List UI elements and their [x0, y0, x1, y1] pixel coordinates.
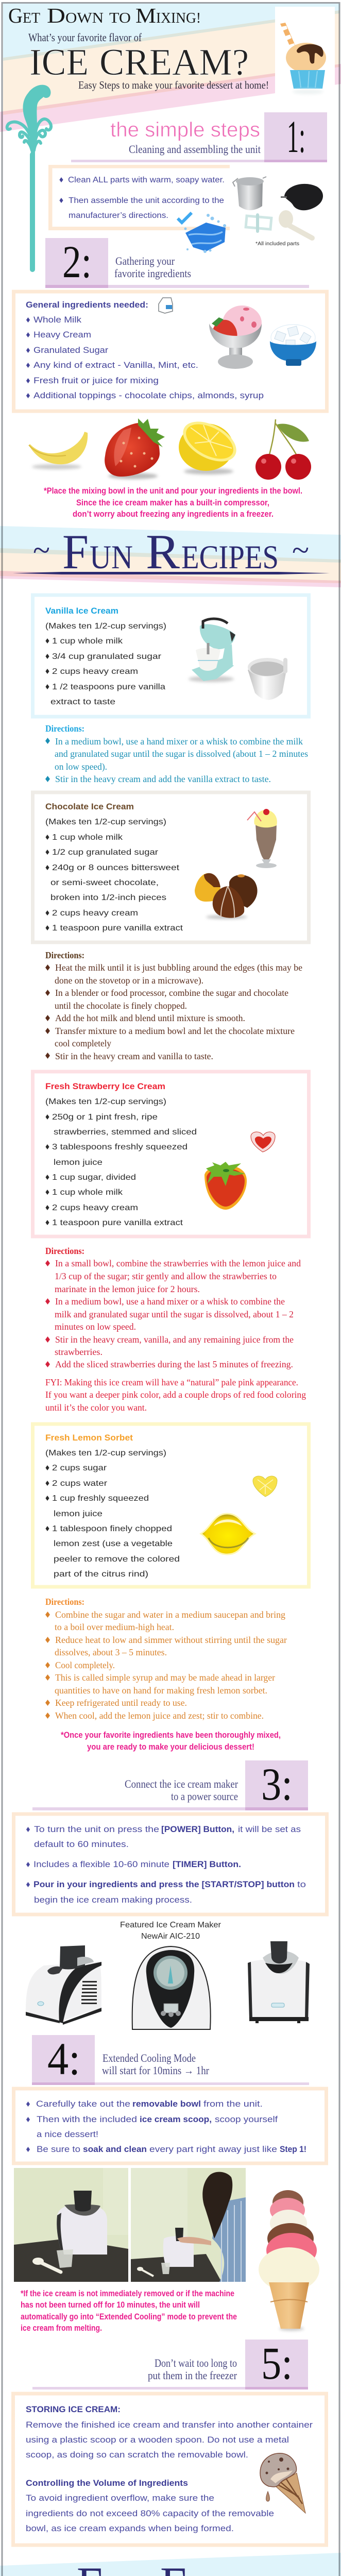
- heading: ice cream: [29, 41, 249, 83]
- panel: power instructions: [TIMER] Button.: [173, 1859, 241, 1869]
- step 1 heading: [71, 112, 327, 162]
- photo: woman using machine: [131, 2168, 246, 2282]
- panel: power instructions: to: [297, 1879, 306, 1889]
- panel: general ingredients: Heavy Cream: [33, 330, 91, 340]
- heading: fun recipes: ~: [33, 533, 50, 567]
- directions: vanilla: In a medium bowl, use a hand mixer or a whisk to combine the milk: [55, 736, 303, 747]
- caption: included parts: *All included parts: [255, 241, 299, 247]
- directions: chocolate: Stir in the heavy cream and vanilla to taste.: [55, 1051, 213, 1061]
- step 5 heading: [32, 2338, 308, 2389]
- panel: vanilla ice cream: 1 cup whole milk: [52, 637, 123, 646]
- photo: machine with cup and scoop: [14, 2168, 128, 2282]
- callout: ready to make dessert: you are ready to make your delicious dessert!: [87, 1742, 254, 1752]
- caption: featured ice cream maker: Featured Ice Cream Maker: [120, 1921, 221, 1929]
- icon: melting cone: [260, 2453, 305, 2513]
- directions: lemon sorbet: to a boil over medium-high heat.: [55, 1622, 174, 1632]
- directions: lemon sorbet: dissolves, about 3 – 5 minutes.: [55, 1647, 167, 1657]
- panel: lemon sorbet: peeler to remove the colored: [54, 1555, 180, 1564]
- panel: removing the ice cream: every part right away just like: [149, 2144, 277, 2154]
- panel: power instructions: Includes a flexible 10-60 minute: [33, 1859, 169, 1869]
- icon: glossy lemon: [201, 1514, 255, 1554]
- title: get down to mixing: ET: [23, 10, 40, 26]
- heading: ice cream: ICE: [29, 41, 89, 83]
- panel: general ingredients: Additional toppings - chocolate chips, almonds, syrup: [33, 391, 264, 400]
- callout: extended cooling note: automatically go into “Extended Cooling” mode to prevent the: [21, 2312, 237, 2321]
- icon: sugar bowl: [270, 325, 316, 366]
- icon: strawberry: [105, 418, 165, 479]
- directions: lemon sorbet: When cool, add the lemon juice and zest; stir to combine.: [55, 1710, 264, 1721]
- panel: general ingredients: [13, 292, 327, 411]
- panel: removing the ice cream: Step 1!: [280, 2144, 306, 2154]
- ornament: teal fountain: [7, 85, 51, 272]
- directions: lemon sorbet: quantities to have on hand for making fresh lemon sorbet.: [55, 1685, 267, 1696]
- panel: strawberry ice cream: 1 cup whole milk: [52, 1188, 123, 1197]
- panel: general ingredients: Whole Milk: [33, 315, 82, 325]
- directions: chocolate: [45, 950, 302, 1061]
- panel: strawberry ice cream: [33, 1072, 309, 1236]
- panel: power instructions: begin the ice cream making process.: [34, 1895, 192, 1905]
- panel: chocolate ice cream: 240g or 8 ounces bittersweet: [52, 863, 180, 872]
- directions: strawberry: strawberries.: [55, 1347, 103, 1357]
- panel: strawberry ice cream: (Makes ten 1/2-cup servings): [45, 1097, 166, 1106]
- step 2 heading: [45, 237, 309, 288]
- panel: storing ice cream: STORING ICE CREAM:: [26, 2404, 121, 2414]
- panel: storing ice cream: [13, 2394, 327, 2545]
- directions: vanilla: [45, 723, 308, 784]
- panel: strawberry ice cream: 3 tablespoons freshly squeezed: [52, 1143, 187, 1151]
- icon: strawberry heart: [251, 1132, 275, 1152]
- step 4 heading: will start for 10mins → 1hr: [102, 2064, 210, 2077]
- icon: mixing cup: [248, 658, 287, 700]
- directions: chocolate: Directions:: [45, 950, 84, 960]
- callout: mixing bowl note: don’t worry about freezing any ingredients in a freezer.: [73, 509, 274, 519]
- heading: fun recipes: ~: [292, 533, 309, 567]
- step 3 heading: Connect the ice cream maker: [125, 1777, 238, 1790]
- panel: vanilla ice cream: extract to taste: [50, 698, 115, 706]
- directions: vanilla: Directions:: [45, 723, 84, 734]
- heading: fun recipes: ECIPES: [181, 539, 279, 576]
- step 4 heading: 4:: [47, 2034, 80, 2084]
- callout: mixing bowl note: [44, 486, 302, 519]
- panel: removing the ice cream: Be sure to: [37, 2144, 80, 2154]
- icon: stand mixer: [189, 619, 235, 682]
- icon: chocolate truffles: [195, 873, 258, 919]
- directions: lemon sorbet: Combine the sugar and water in a medium saucepan and bring: [55, 1609, 285, 1620]
- step 3 heading: to a power source: [171, 1790, 238, 1803]
- panel: storing ice cream: To avoid ingredient overflow, make sure the: [26, 2493, 214, 2503]
- title: get down to mixing: OWN: [65, 10, 104, 26]
- panel: vanilla ice cream: 3/4 cup granulated sugar: [52, 652, 162, 661]
- directions: lemon sorbet: Reduce heat to low and simmer without stirring until the sugar: [55, 1635, 287, 1645]
- directions: strawberry: FYI: Making this ice cream will have a “natural” pale pink appearance.: [45, 1377, 298, 1387]
- directions: lemon sorbet: Cool completely.: [55, 1660, 115, 1670]
- heading: fun recipes: UN: [90, 539, 133, 576]
- directions: strawberry: minutes on low speed.: [55, 1321, 136, 1332]
- directions: chocolate: Heat the milk until it is just bubbling around the edges (this may be: [55, 962, 302, 973]
- directions: chocolate: until the chocolate is finely chopped.: [55, 1001, 187, 1011]
- icon: milk carton: [159, 298, 173, 313]
- panel: general ingredients: Granulated Sugar: [33, 345, 108, 355]
- step 1 heading: Cleaning and assembling the unit: [129, 143, 261, 156]
- panel: storing ice cream: Remove the finished ice cream and transfer into another container: [26, 2420, 313, 2430]
- callout: ready to make dessert: [61, 1730, 281, 1752]
- photo: maker angled view: [26, 1945, 101, 2025]
- icon: machine parts: [233, 177, 323, 238]
- panel: chocolate ice cream: 1 teaspoon pure vanilla extract: [52, 924, 183, 933]
- directions: lemon sorbet: [45, 1597, 287, 1721]
- panel: lemon sorbet: [33, 1424, 309, 1587]
- header colour bands: [0, 4, 341, 132]
- panel: removing the ice cream: Carefully take out the: [36, 2099, 130, 2109]
- directions: chocolate: done on the stovetop or in a microwave).: [55, 975, 203, 986]
- directions: chocolate: Add the hot milk and blend until mixture is smooth.: [55, 1013, 245, 1023]
- icon: strawberry sundae: [209, 306, 262, 369]
- panel: general ingredients: Any kind of extract - Vanilla, Mint, etc.: [33, 360, 198, 370]
- directions: vanilla: on low speed).: [55, 761, 107, 772]
- step 1 heading: 1:: [287, 112, 305, 162]
- panel: storing ice cream: using a plastic scoop or a wooden spoon. Do not use a metal: [26, 2435, 289, 2445]
- step 2 heading: 2:: [62, 237, 92, 287]
- step 3 heading: [32, 1759, 308, 1810]
- title: get down to mixing: IXING!: [156, 10, 201, 26]
- panel: lemon sorbet: Fresh Lemon Sorbet: [45, 1433, 133, 1443]
- icon: milkshake: [247, 809, 277, 868]
- panel: removing the ice cream: soak and clean: [83, 2144, 147, 2154]
- panel: storing ice cream: ingredients do not exceed 80% capacity of the removable: [26, 2509, 274, 2518]
- heading: fun recipes: R: [146, 524, 180, 579]
- panel: storing ice cream: Controlling the Volume of Ingredients: [26, 2478, 188, 2488]
- panel: power instructions: To turn the unit on press the: [34, 1824, 159, 1834]
- panel: cleaning instructions: [48, 165, 230, 230]
- title: get down to mixing: M: [135, 4, 156, 27]
- panel: chocolate ice cream: broken into 1/2-inch pieces: [50, 893, 166, 902]
- panel: removing the ice cream: [13, 2089, 327, 2163]
- panel: vanilla ice cream: 1 /2 teaspoons pure vanilla: [52, 683, 165, 691]
- panel: storing ice cream: scoop, as doing so can scratch the removable bowl.: [26, 2450, 248, 2460]
- step 4 heading: [32, 2034, 309, 2085]
- callout: extended cooling note: [21, 2289, 237, 2333]
- panel: strawberry ice cream: 1 cup sugar, divided: [52, 1173, 136, 1182]
- icon: check mark and sponge: [178, 213, 226, 253]
- heading: ice cream: CREAM?: [99, 41, 249, 83]
- panel: lemon sorbet: 1 cup freshly squeezed: [52, 1494, 149, 1503]
- callout: ready to make dessert: *Once your favorite ingredients have been thoroughly mixed,: [61, 1730, 281, 1740]
- step 1 heading: the simple steps: [110, 118, 260, 141]
- caption: featured ice cream maker: [120, 1921, 221, 1941]
- title: get down to mixing: TO: [109, 10, 131, 26]
- step 2 heading: favorite ingredients: [114, 267, 191, 280]
- fun facts banner bands: [0, 2553, 341, 2576]
- panel: removing the ice cream: from the unit.: [203, 2099, 263, 2109]
- panel: chocolate ice cream: 2 cups heavy cream: [52, 909, 138, 918]
- title: get down to mixing: [8, 4, 201, 27]
- directions: chocolate: cool completely: [55, 1038, 111, 1048]
- fruit row: [29, 413, 311, 480]
- panel: chocolate ice cream: Chocolate Ice Cream: [45, 802, 134, 811]
- panel: lemon sorbet: lemon zest (use a vegetable: [54, 1539, 173, 1548]
- step 3 heading: 3:: [261, 1759, 293, 1810]
- panel: lemon sorbet: 2 cups water: [52, 1479, 108, 1488]
- panel: removing the ice cream: Then with the included: [37, 2114, 137, 2124]
- directions: lemon sorbet: Keep refrigerated until ready to use.: [55, 1698, 187, 1708]
- panel: strawberry ice cream: 1 teaspoon pure vanilla extract: [52, 1218, 183, 1227]
- panel: strawberry ice cream: strawberries, stemmed and sliced: [54, 1128, 197, 1137]
- directions: lemon sorbet: This is called simple syrup and may be made ahead in larger: [55, 1672, 275, 1683]
- panel: lemon sorbet: lemon juice: [54, 1510, 103, 1518]
- icon: banana: [29, 432, 88, 469]
- panel: chocolate ice cream: or semi-sweet chocolate,: [50, 878, 159, 887]
- panel: power instructions: [13, 1814, 327, 1914]
- step 5 heading: 5:: [261, 2338, 293, 2389]
- directions: strawberry: Add the sliced strawberries during the last 5 minutes of freezing.: [55, 1359, 293, 1369]
- title: get down to mixing: G: [8, 4, 23, 27]
- panel: storing ice cream: bowl, as ice cream expands when being formed.: [26, 2523, 234, 2533]
- panel: power instructions: default to 60 minutes.: [34, 1839, 129, 1849]
- panel: general ingredients: General ingredients needed:: [26, 300, 148, 310]
- directions: strawberry: until it’s the color you want.: [45, 1402, 147, 1413]
- panel: removing the ice cream: removable bowl: [132, 2099, 201, 2109]
- heading: fun recipes: [13, 524, 330, 579]
- step 5 heading: put them in the freezer: [148, 2369, 237, 2382]
- panel: vanilla ice cream: (Makes ten 1/2-cup servings): [45, 622, 166, 631]
- panel: removing the ice cream: scoop yourself: [215, 2114, 278, 2124]
- panel: vanilla ice cream: Vanilla Ice Cream: [45, 606, 118, 616]
- directions: strawberry: marinate in the lemon juice for 2 hours.: [55, 1284, 200, 1294]
- product photos: ice cream maker: [26, 1941, 310, 2029]
- icon: lemon heart: [253, 1476, 277, 1497]
- caption: featured ice cream maker: NewAir AIC-210: [141, 1932, 200, 1941]
- icon: cherries: [255, 419, 311, 480]
- icon: ice cream cup with wafer: [275, 7, 335, 96]
- directions: strawberry: 1/3 cup of the sugar; stir gently and allow the strawberries to: [55, 1271, 277, 1281]
- callout: mixing bowl note: *Place the mixing bowl in the unit and pour your ingredients in the bowl.: [44, 486, 302, 496]
- directions: vanilla: and granulated sugar until the sugar is dissolved (about 1 – 2 minutes: [55, 749, 308, 759]
- icon: lemon half: [177, 413, 243, 474]
- callout: extended cooling note: has not been turned off for 10 minutes, the unit will: [21, 2300, 200, 2310]
- panel: power instructions: Pour in your ingredients and press the [START/STOP] button: [33, 1879, 295, 1889]
- panel: chocolate ice cream: 1/2 cup granulated sugar: [52, 848, 159, 857]
- panel: strawberry ice cream: 250g or 1 pint fresh, ripe: [52, 1113, 158, 1122]
- photo: maker front view: [248, 1941, 310, 2023]
- panel: cleaning instructions: manufacturer’s directions.: [69, 211, 168, 220]
- panel: cleaning instructions: Then assemble the unit according to the: [69, 196, 224, 205]
- panel: chocolate ice cream: 1 cup whole milk: [52, 833, 123, 842]
- icon: tall ice cream cone: [259, 2190, 319, 2331]
- directions: chocolate: Transfer mixture to a medium bowl and let the chocolate mixture: [55, 1026, 295, 1036]
- panel: cleaning instructions: Clean ALL parts with warm, soapy water.: [68, 176, 225, 184]
- directions: vanilla: Stir in the heavy cream and add the vanilla extract to taste.: [55, 774, 271, 784]
- panel: removing the ice cream: ice cream scoop,: [140, 2114, 212, 2124]
- subtitle: favorite flavor: What’s your favorite flavor of: [28, 31, 142, 44]
- panel: general ingredients: Fresh fruit or juice for mixing: [33, 376, 159, 385]
- panel: vanilla ice cream: 2 cups heavy cream: [52, 667, 138, 676]
- panel: strawberry ice cream: Fresh Strawberry Ice Cream: [45, 1081, 165, 1091]
- panel: chocolate ice cream: [33, 792, 309, 942]
- directions: strawberry: [45, 1246, 306, 1413]
- panel: lemon sorbet: part of the citrus rind): [54, 1570, 148, 1579]
- heading: fun recipes: F: [62, 524, 89, 579]
- directions: strawberry: milk and granulated sugar until the sugar is dissolved, about 1 – 2: [55, 1309, 294, 1319]
- step 2 heading: Gathering your: [115, 255, 175, 267]
- callout: extended cooling note: ice cream from melting.: [21, 2323, 102, 2333]
- directions: strawberry: Directions:: [45, 1246, 84, 1256]
- panel: removing the ice cream: a nice dessert!: [37, 2129, 98, 2139]
- panel: lemon sorbet: 1 tablespoon finely chopped: [52, 1524, 172, 1533]
- callout: mixing bowl note: Since the ice cream maker has a built-in compressor,: [76, 498, 269, 507]
- panel: power instructions: it will be set as: [238, 1824, 301, 1834]
- step 5 heading: Don’t wait too long to: [155, 2357, 237, 2369]
- callout: extended cooling note: *If the ice cream is not immediately removed or if the machine: [21, 2289, 234, 2298]
- panel: vanilla ice cream: [33, 595, 309, 717]
- title: get down to mixing: D: [47, 4, 65, 27]
- panel: lemon sorbet: 2 cups sugar: [52, 1464, 107, 1472]
- panel: lemon sorbet: (Makes ten 1/2-cup servings): [45, 1449, 166, 1458]
- fun recipes banner bands: [0, 526, 341, 587]
- step 4 heading: Extended Cooling Mode: [103, 2052, 196, 2064]
- tagline: Easy Steps to make your favorite dessert at home!: [78, 79, 269, 91]
- directions: lemon sorbet: Directions:: [45, 1597, 84, 1607]
- panel: chocolate ice cream: (Makes ten 1/2-cup servings): [45, 818, 166, 826]
- panel: strawberry ice cream: 2 cups heavy cream: [52, 1204, 138, 1212]
- directions: strawberry: In a medium bowl, use a hand mixer or a whisk to combine the: [55, 1296, 285, 1307]
- directions: strawberry: If you want a deeper pink color, add a couple drops of red food coloring: [45, 1389, 306, 1400]
- directions: chocolate: In a blender or food processor, combine the sugar and chocolate: [55, 988, 288, 998]
- panel: strawberry ice cream: lemon juice: [54, 1158, 103, 1167]
- icon: cartoon strawberry: [204, 1162, 247, 1210]
- photo: maker top view: [132, 1946, 211, 2029]
- panel: power instructions: [POWER] Button,: [161, 1824, 234, 1834]
- directions: strawberry: Stir in the heavy cream, vanilla, and any remaining juice from the: [55, 1334, 294, 1345]
- heading: fun facts: [12, 2557, 328, 2576]
- directions: strawberry: In a small bowl, combine the strawberries with the lemon juice and: [55, 1258, 301, 1268]
